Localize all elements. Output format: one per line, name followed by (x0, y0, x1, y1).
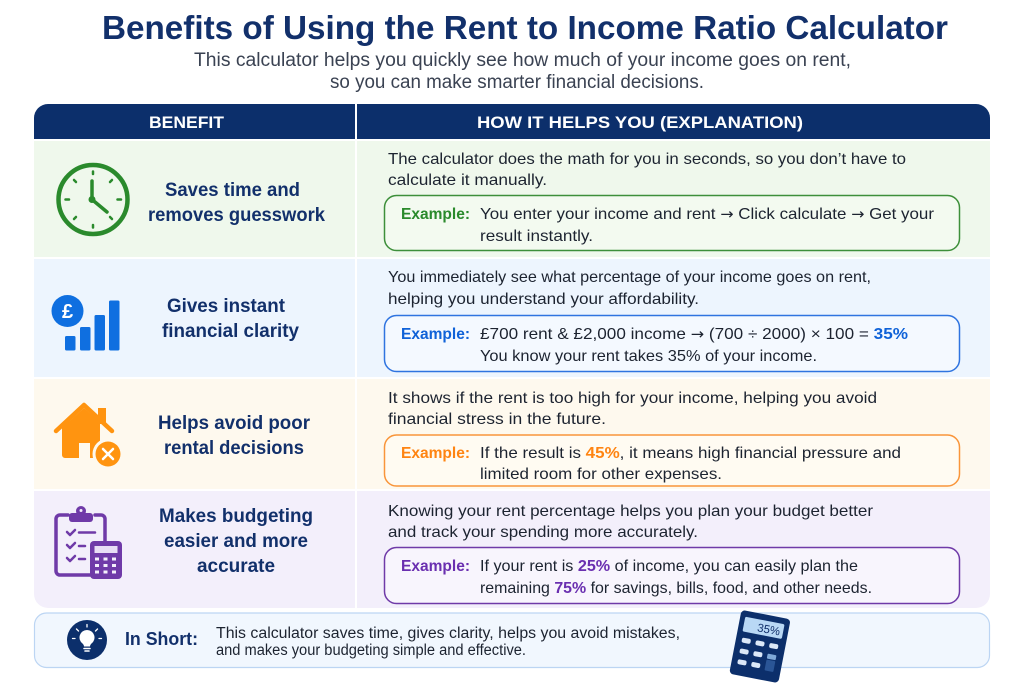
example box: If the result is 45%, it means high financial pressure and (480, 445, 901, 462)
title: Benefits of Using the Rent to Income Ratio Calculator (102, 10, 948, 47)
explanation: It shows if the rent is too high for your income, helping you avoid (388, 390, 877, 407)
panel: instant clarity (34, 259, 990, 377)
icon: clock (58, 165, 128, 234)
benefit label: Helps avoid poor (158, 412, 310, 434)
subtitle: This calculator helps you quickly see how much of your income goes on rent, (194, 50, 851, 71)
benefit label: Saves time and (165, 179, 300, 201)
label: in short: In Short: (125, 629, 198, 649)
benefit label (148, 179, 325, 226)
example box: limited room for other expenses. (480, 466, 722, 483)
icon: calculator: 35% (756, 622, 781, 638)
example box: Example: (401, 445, 470, 462)
explanation (388, 151, 906, 189)
explanation: and track your spending more accurately. (388, 524, 698, 541)
example box: Example: (401, 558, 470, 575)
example box: £700 rent & £2,000 income → (700 ÷ 2000) × 100 = 35% (480, 325, 908, 343)
example box: You know your rent takes 35% of your income. (480, 348, 817, 365)
benefit label (162, 295, 299, 342)
explanation: Knowing your rent percentage helps you plan your budget better (388, 503, 874, 520)
summary text: This calculator saves time, gives clarity, helps you avoid mistakes, (216, 625, 680, 642)
example box (384, 196, 960, 250)
example box (384, 435, 960, 486)
explanation (388, 269, 871, 308)
benefit label (158, 412, 310, 459)
explanation (388, 390, 877, 428)
summary text: and makes your budgeting simple and effective. (216, 642, 526, 659)
icon: clipboard and calculator (56, 506, 122, 579)
benefit label (159, 505, 313, 577)
benefit label: easier and more (164, 530, 308, 552)
benefit label: financial clarity (162, 320, 299, 342)
panel: poor decisions (34, 379, 990, 489)
benefit label: rental decisions (164, 437, 304, 459)
icon: pound and bars: £ (62, 301, 73, 323)
explanation: You immediately see what percentage of your income goes on rent, (388, 269, 871, 286)
table header (34, 104, 990, 139)
benefit label: accurate (197, 555, 275, 577)
icon: lightbulb (67, 620, 107, 660)
example box: result instantly. (480, 228, 593, 245)
example box: If your rent is 25% of income, you can easily plan the (480, 558, 858, 575)
subtitle: so you can make smarter financial decisions. (330, 72, 704, 93)
example box: You enter your income and rent → Click calculate → Get your (480, 205, 935, 223)
example box (384, 548, 960, 604)
explanation: The calculator does the math for you in seconds, so you don’t have to (388, 151, 906, 168)
panel: in short (34, 610, 990, 683)
example box: Example: (401, 326, 470, 343)
example box (384, 316, 960, 372)
header: explanation: HOW IT HELPS YOU (EXPLANATION) (477, 113, 803, 132)
subtitle (194, 50, 851, 93)
summary text (216, 625, 680, 659)
icon: calculator (729, 610, 791, 683)
example box: Example: (401, 206, 470, 223)
explanation: financial stress in the future. (388, 411, 606, 428)
icon: pound and bars (52, 295, 120, 350)
benefit label: Makes budgeting (159, 505, 313, 527)
example box: remaining 75% for savings, bills, food, and other needs. (480, 580, 872, 597)
explanation: helping you understand your affordability. (388, 291, 699, 308)
benefit label: removes guesswork (148, 204, 325, 226)
header: benefit: BENEFIT (149, 113, 225, 132)
explanation (388, 503, 874, 541)
panel: budgeting (34, 491, 990, 608)
benefit label: Gives instant (167, 295, 285, 317)
icon: house with cross (56, 405, 124, 470)
explanation: calculate it manually. (388, 172, 547, 189)
panel: saves time (34, 141, 990, 257)
